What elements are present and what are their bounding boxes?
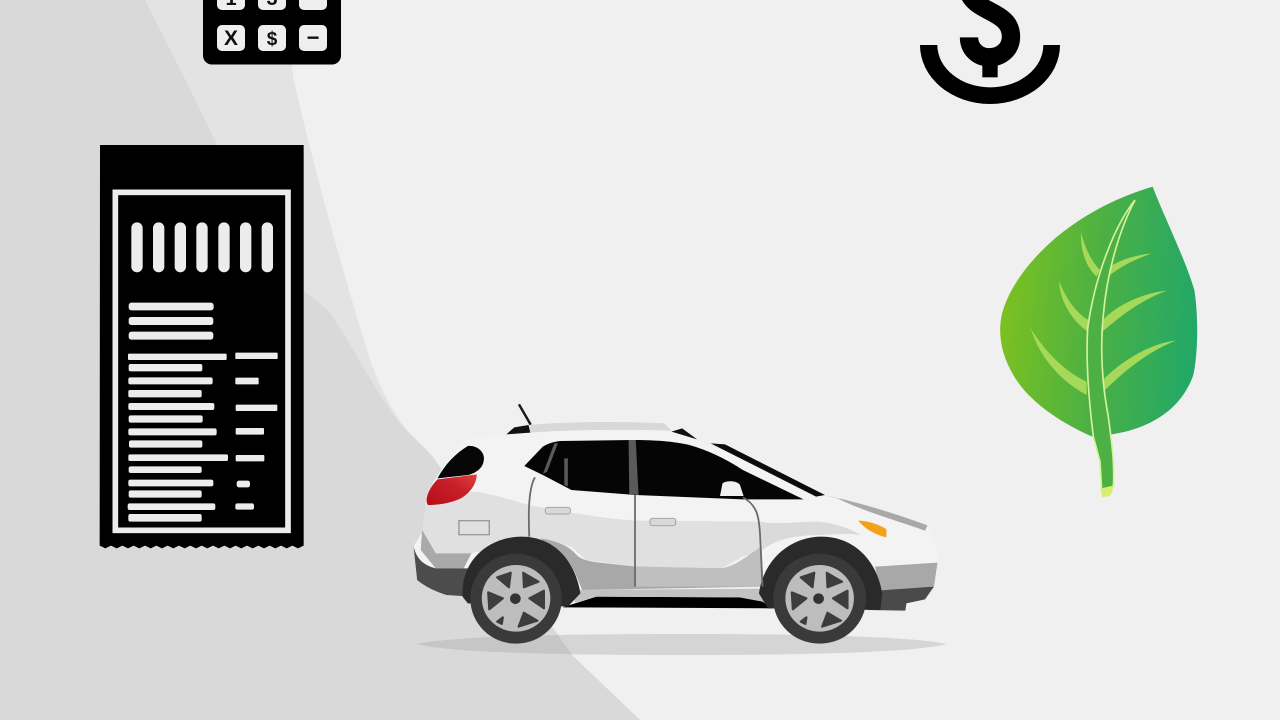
side sill <box>571 589 764 603</box>
front wheel <box>773 554 866 644</box>
roof highlight <box>530 422 671 433</box>
side windows <box>524 440 804 499</box>
car: silver SUV side view <box>414 404 946 655</box>
icon: green leaf <box>1000 187 1197 497</box>
headlight amber <box>858 521 886 537</box>
windshield <box>711 443 825 497</box>
icon: calculator: $ <box>267 29 278 50</box>
icon: receipt <box>100 145 304 548</box>
window pillars <box>543 440 639 495</box>
roof rail <box>506 425 697 439</box>
antenna <box>519 404 531 425</box>
icon: calculator: X <box>224 27 238 50</box>
rear wheel arch <box>462 537 580 607</box>
icon: calculator: − <box>307 25 319 50</box>
icon: calculator <box>203 0 341 64</box>
rear window <box>437 446 484 478</box>
side mirror <box>720 481 744 496</box>
door handles <box>545 507 676 526</box>
rear bumper <box>414 547 470 597</box>
car ground shadow <box>416 634 946 655</box>
body shading <box>421 492 937 592</box>
front wheel arch <box>759 537 882 610</box>
underbody <box>562 597 771 608</box>
car body <box>414 421 937 610</box>
icon: dollar sign over arc <box>920 0 1060 104</box>
door lines and handles <box>459 477 762 587</box>
tail light <box>427 474 477 505</box>
rear wheel <box>470 554 562 644</box>
front bumper <box>868 587 934 611</box>
